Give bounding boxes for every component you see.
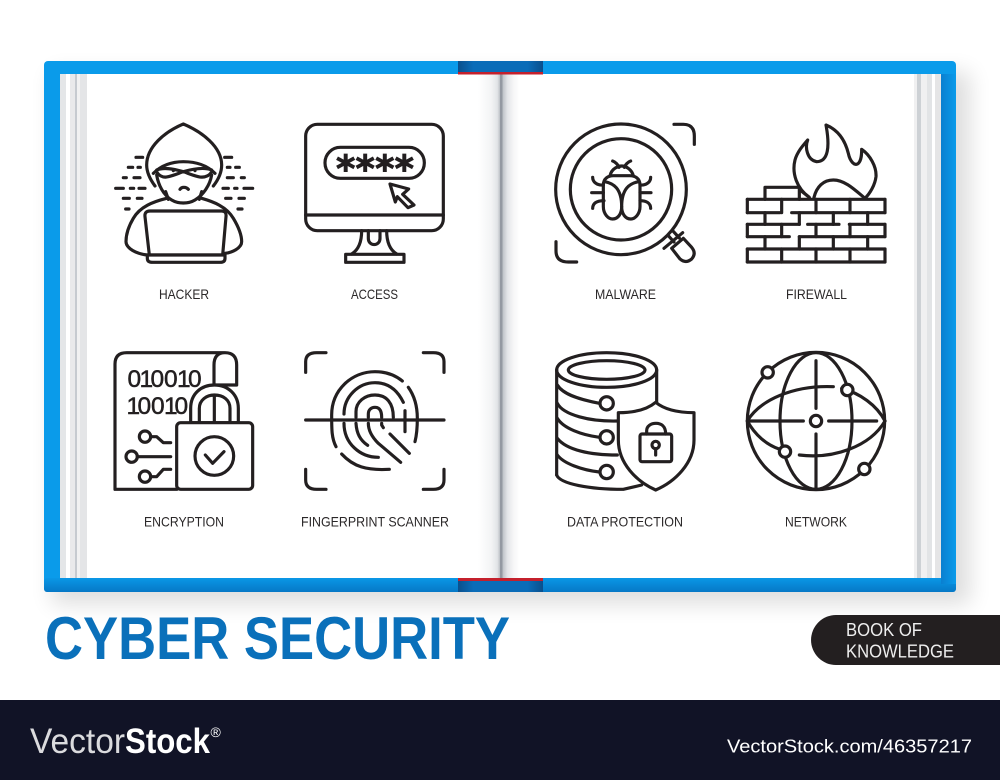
icon: hacker — [116, 124, 253, 262]
footer logo bold: Stock — [125, 722, 210, 761]
label: malware: MALWARE — [595, 286, 656, 302]
label: fingerprint scanner: FINGERPRINT SCANNER — [301, 514, 449, 530]
binary digits: 10010 — [126, 393, 188, 420]
label: network: NETWORK — [785, 514, 848, 530]
spine bottom band — [458, 578, 543, 592]
top ribbon — [458, 72, 543, 74]
panel: fingerprint scanner — [301, 353, 449, 530]
icon: brick wall with flame — [747, 125, 885, 262]
left page edge strips — [60, 74, 87, 578]
label: firewall: FIREWALL — [786, 286, 847, 302]
cover bottom edge — [44, 578, 956, 592]
book cover — [44, 61, 956, 592]
label: access: ACCESS — [351, 286, 398, 302]
book shadow — [52, 72, 970, 604]
pages — [60, 74, 941, 578]
badge: book of knowledge — [811, 615, 1000, 665]
panel: data protection — [557, 353, 694, 530]
footer background — [0, 700, 1000, 780]
badge text line 1: BOOK OF — [846, 619, 922, 640]
book — [44, 61, 970, 604]
label: hacker: HACKER — [159, 286, 209, 302]
panel: firewall — [747, 125, 885, 302]
badge text line 2: KNOWLEDGE — [846, 640, 954, 662]
password asterisks: **** — [336, 148, 414, 191]
panel: access — [306, 124, 443, 302]
icon: encrypted document and padlock — [115, 353, 253, 489]
registered mark: ® — [210, 724, 222, 740]
badge background — [811, 615, 1000, 665]
footer bar — [0, 700, 1000, 780]
page gutter shadow — [478, 74, 520, 578]
label: data protection: DATA PROTECTION — [567, 514, 683, 530]
panel: hacker — [116, 124, 253, 302]
title: CYBER SECURITY — [45, 605, 510, 672]
panel: network — [747, 352, 885, 530]
right page edge strips — [914, 74, 941, 578]
label: encryption: ENCRYPTION — [144, 514, 224, 530]
icon: globe network — [747, 352, 885, 490]
icon: database with shield — [557, 353, 694, 490]
spine top band — [458, 61, 543, 74]
panel: encryption — [115, 353, 253, 530]
cover right edge — [941, 74, 956, 584]
icon: monitor with password — [306, 124, 443, 262]
bottom ribbon — [458, 578, 543, 581]
footer image id: VectorStock.com/46357217 — [727, 736, 972, 756]
footer logo: Vector — [30, 722, 125, 761]
panel: malware — [556, 124, 694, 302]
binary digits: 010010 — [128, 366, 202, 393]
icon: fingerprint scanner — [306, 353, 444, 489]
icon: bug under magnifier — [556, 124, 694, 262]
